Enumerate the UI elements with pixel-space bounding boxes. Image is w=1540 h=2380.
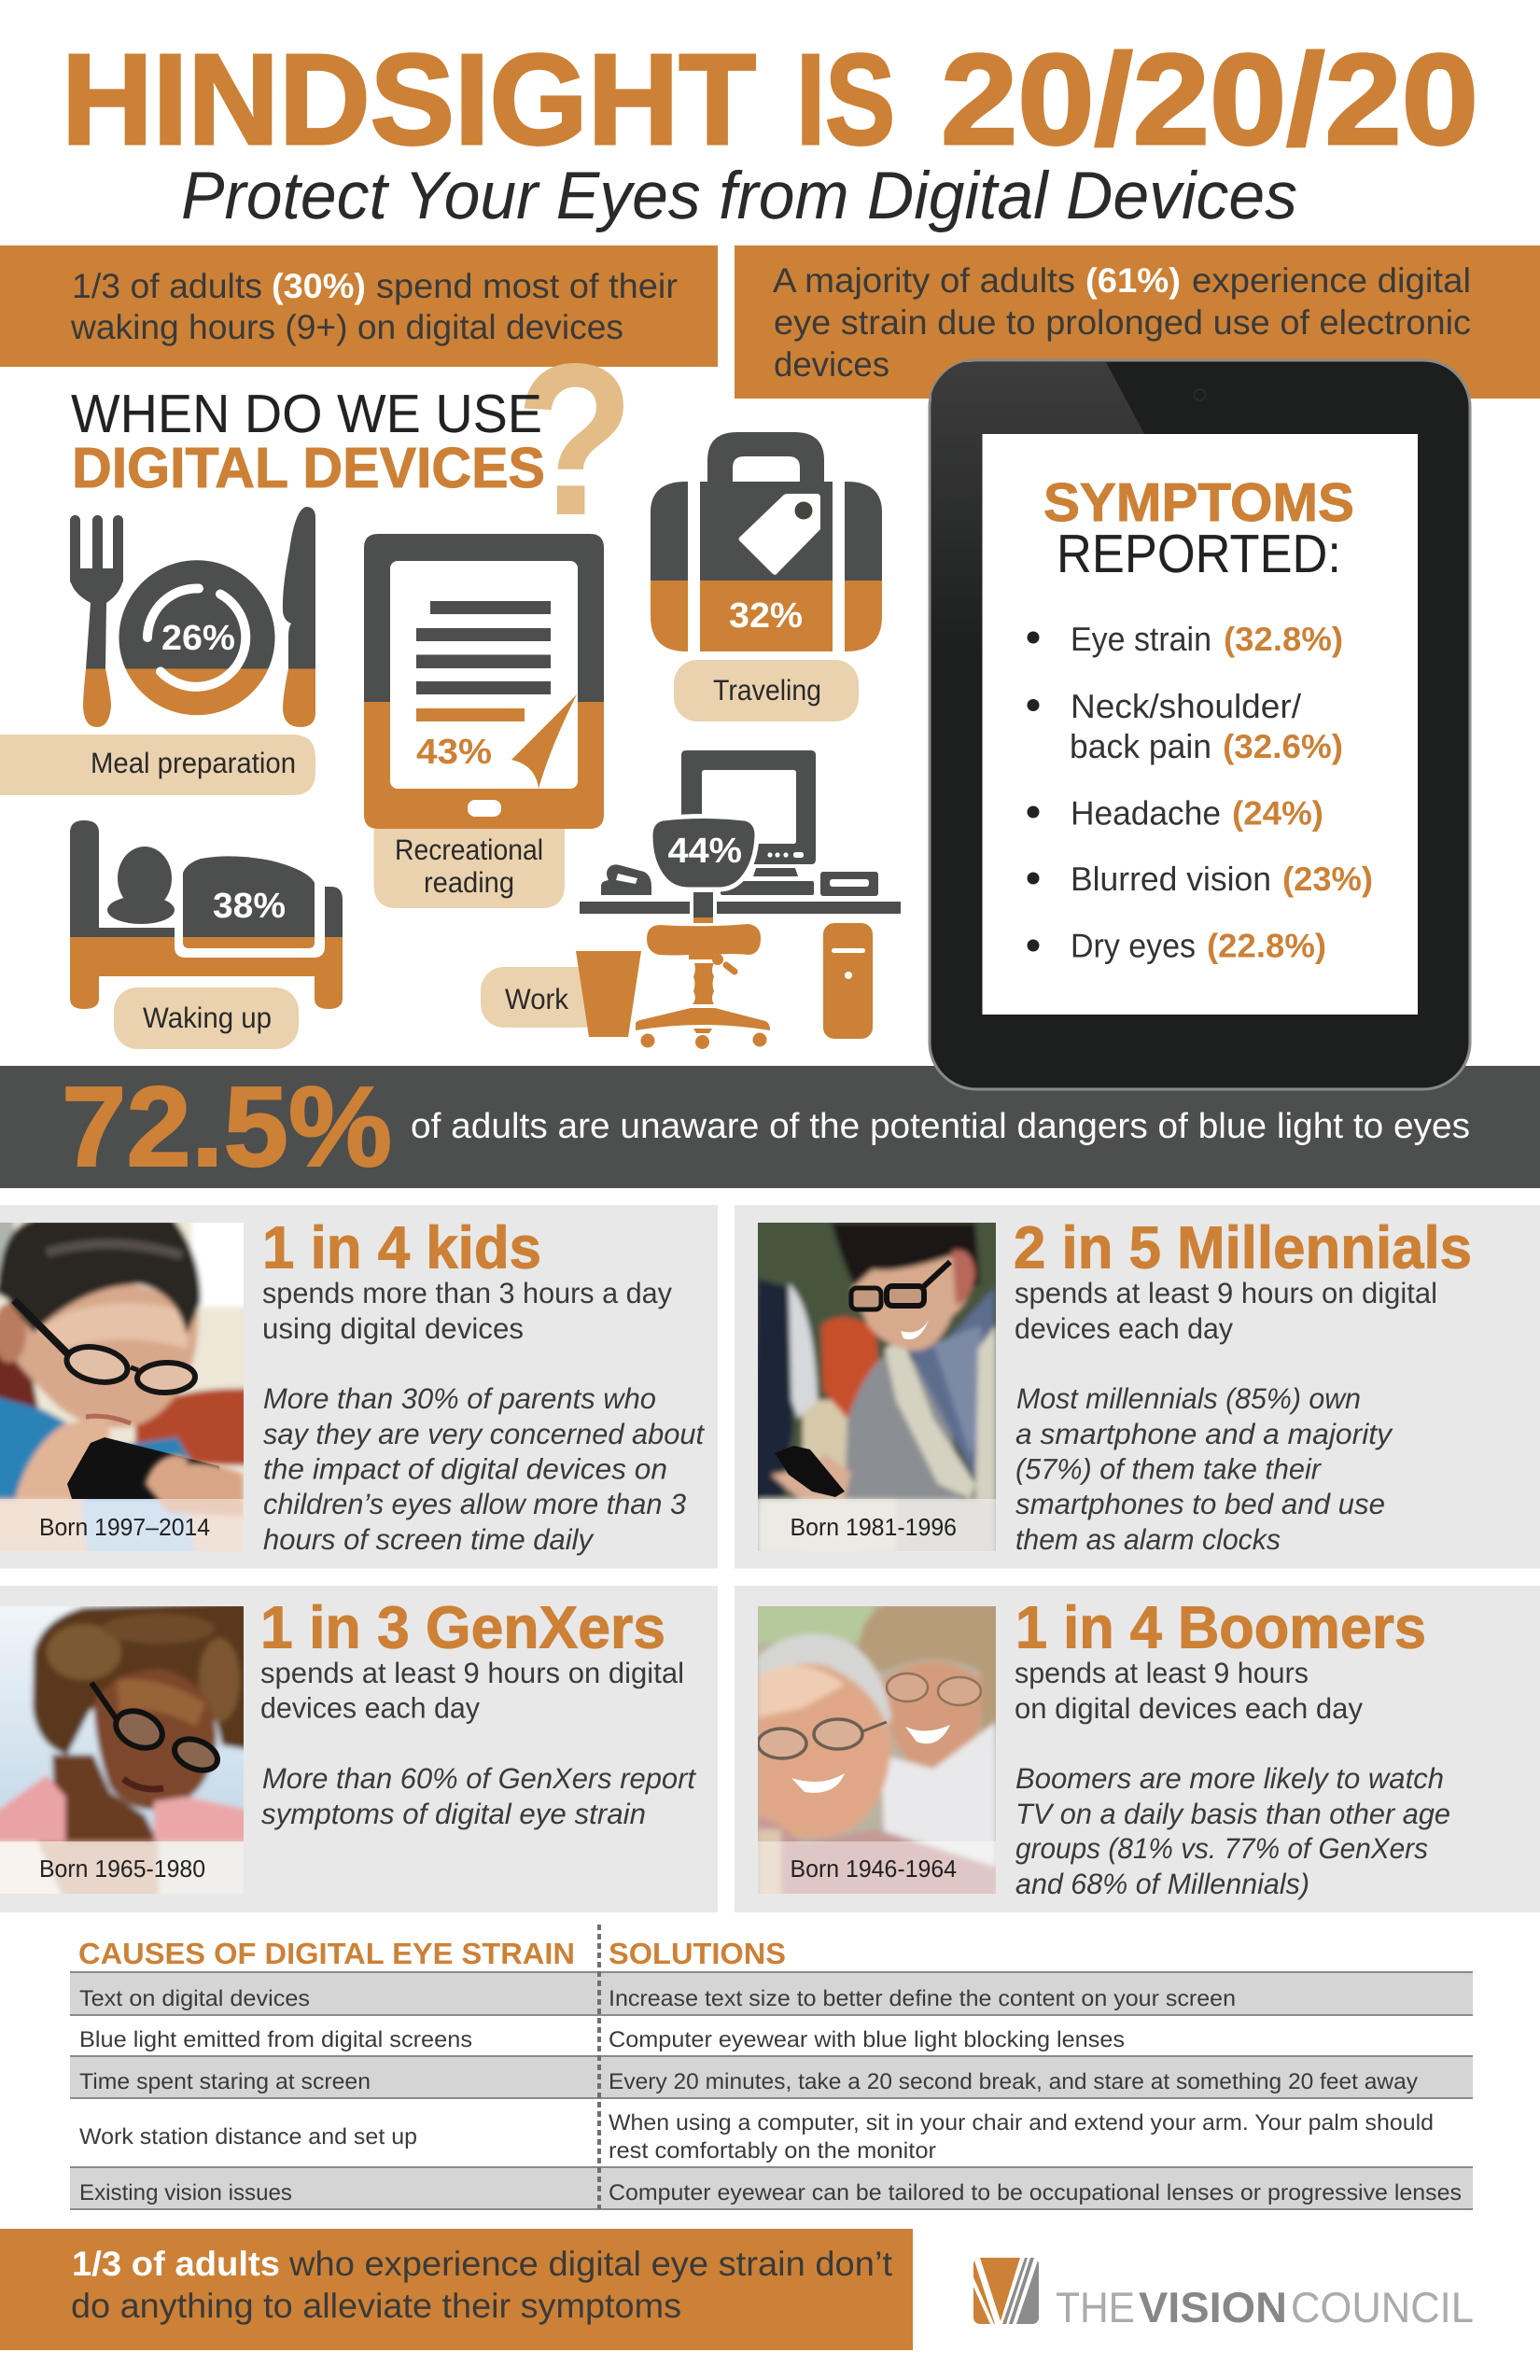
title: HINDSIGHT [62, 28, 756, 172]
icon: question mark: ? [515, 319, 635, 561]
stat heading: 1 in 4 kids [262, 1213, 541, 1281]
banner: 1/3 of adults do nothing: do anything to alleviate their symptoms [71, 2287, 681, 2325]
banner: 30% of adults [0, 245, 718, 367]
banner: 61% of adults [735, 245, 1540, 399]
row text: Work station distance and set up [79, 2124, 417, 2149]
detail text [1015, 1382, 1394, 1556]
banner: 30% of adults: (30%) [272, 267, 366, 305]
detail text: Boomers are more likely to watch [1015, 1762, 1444, 1795]
icon: suitcase 32% [651, 432, 882, 651]
detail text: TV on a daily basis than other age [1015, 1798, 1450, 1830]
label: meal preparation [0, 735, 315, 795]
detail text [261, 1762, 696, 1830]
symptoms list: (24%) [1232, 793, 1323, 833]
symptoms list [1027, 620, 1373, 965]
label: waking up: Waking up [143, 1001, 272, 1034]
detail text: them as alarm clocks [1015, 1523, 1281, 1556]
description: spends at least 9 hours [1015, 1657, 1309, 1689]
label: work [481, 967, 607, 1028]
stat heading: 2 in 5 Millennials [1014, 1213, 1472, 1281]
detail text [263, 1382, 705, 1556]
detail text: groups (81% vs. 77% of GenXers [1015, 1832, 1428, 1865]
symptoms heading: REPORTED: [1057, 524, 1341, 584]
photo: older couple [758, 1606, 996, 1894]
label: meal preparation: Meal preparation [91, 747, 296, 779]
label: traveling [674, 660, 859, 721]
heading: causes: CAUSES OF DIGITAL EYE STRAIN [78, 1937, 575, 1970]
symptoms list: (32.8%) [1224, 620, 1343, 658]
row text: Time spent staring at screen [79, 2069, 371, 2094]
label: waking up [114, 987, 299, 1049]
banner: 61% of adults: devices [774, 345, 889, 384]
detail text: Most millennials (85%) own [1016, 1382, 1361, 1415]
title: 20/20/20 [941, 28, 1478, 172]
symptoms list: (23%) [1282, 860, 1373, 898]
label: traveling: Traveling [713, 674, 821, 707]
description: spends more than 3 hours a day [262, 1277, 672, 1309]
icon: tablet reading 43%: 43% [416, 733, 492, 772]
description [1015, 1277, 1437, 1345]
subtitle: Protect Your Eyes from Digital Devices [181, 159, 1297, 233]
banner: 61% of adults: A majority of adults [773, 261, 1075, 300]
panel: symptoms tablet [930, 360, 1470, 1089]
icon: office desk 44%: 44% [668, 832, 742, 871]
heading: when do we use digital devices: WHEN DO WE USE [71, 384, 542, 444]
heading: when do we use digital devices: DIGITAL DEVICES [72, 436, 545, 499]
table: causes and solutions [70, 1925, 1473, 2210]
row text: Computer eyewear can be tailored to be occupational lenses or progressive lenses [609, 2180, 1462, 2205]
banner: 61% of adults: eye strain due to prolonged use of electronic [774, 303, 1471, 342]
description: devices each day [260, 1691, 480, 1725]
heading: when do we use digital devices [71, 384, 545, 499]
stat bar: 72.5%: of adults are unaware of the potential dangers of blue light to eyes [411, 1107, 1470, 1146]
banner: 30% of adults: spend most of their [376, 267, 678, 305]
description [260, 1657, 684, 1725]
label: recreational reading: reading [424, 866, 514, 899]
panel: genxers [0, 1586, 718, 1912]
description: on digital devices each day [1015, 1692, 1363, 1725]
photo: boy with smartphone [0, 1213, 257, 1559]
icon: meal preparation 26%: 26% [161, 619, 235, 658]
caption: Born 1965-1980 [39, 1855, 205, 1883]
label: recreational reading [373, 829, 565, 908]
banner: 1/3 of adults do nothing [0, 2229, 913, 2350]
banner: 30% of adults: waking hours (9+) on digital devices [70, 308, 623, 346]
banner: 1/3 of adults do nothing: who experience digital eye strain don’t [288, 2245, 893, 2283]
description [1015, 1657, 1363, 1725]
stat bar: 72.5% [0, 1063, 1540, 1190]
logo mark [973, 2258, 1039, 2324]
caption: Born 1946-1964 [790, 1855, 957, 1883]
logo wordmark: VISION [1139, 2283, 1287, 2331]
icon: suitcase 32%: 32% [729, 596, 803, 636]
stat heading: 1 in 4 Boomers [1015, 1594, 1426, 1661]
panel: kids [0, 1205, 718, 1568]
symptoms list: Blurred vision [1071, 860, 1271, 898]
row text: Computer eyewear with blue light blocking lenses [609, 2027, 1125, 2052]
icon: tablet reading 43% [364, 534, 604, 829]
detail text: More than 30% of parents who [263, 1382, 656, 1415]
label: recreational reading: Recreational [395, 833, 543, 866]
caption: Born 1997–2014 [39, 1513, 210, 1541]
icon: office desk 44% [576, 750, 901, 1049]
row text [79, 1986, 1462, 2205]
panel: millennials [735, 1205, 1540, 1568]
row text: Text on digital devices [79, 1986, 310, 2011]
icon: meal preparation 26% [70, 507, 315, 727]
symptoms list: Neck/shoulder/ [1071, 687, 1301, 725]
symptoms list: (32.6%) [1223, 727, 1343, 765]
banner: 30% of adults: 1/3 of adults [72, 267, 262, 305]
title [62, 28, 1478, 172]
detail text: hours of screen time daily [263, 1523, 595, 1556]
description: spends at least 9 hours on digital [1015, 1277, 1437, 1309]
row text: rest comfortably on the monitor [609, 2138, 936, 2163]
photo: man with phone [758, 1223, 996, 1551]
heading: solutions: SOLUTIONS [609, 1937, 786, 1970]
symptoms list: back pain [1070, 727, 1211, 765]
detail text: say they are very concerned about [263, 1418, 705, 1450]
icon: bed 38%: 38% [213, 887, 286, 926]
row text: Every 20 minutes, take a 20 second break, and stare at something 20 feet away [609, 2069, 1418, 2094]
detail text: a smartphone and a majority [1015, 1418, 1394, 1450]
banner: 61% of adults: experience digital [1192, 261, 1471, 300]
detail text: symptoms of digital eye strain [261, 1798, 646, 1830]
detail text: smartphones to bed and use [1015, 1488, 1385, 1520]
detail text: (57%) of them take their [1015, 1452, 1323, 1486]
label: work: Work [505, 983, 568, 1015]
detail text [1015, 1762, 1450, 1900]
symptoms list: Dry eyes [1071, 926, 1196, 965]
logo: the vision council [973, 2258, 1473, 2324]
description: spends at least 9 hours on digital [260, 1657, 684, 1689]
row text: Increase text size to better define the content on your screen [609, 1986, 1236, 2011]
row text: Existing vision issues [79, 2180, 292, 2205]
logo wordmark: COUNCIL [1291, 2283, 1474, 2331]
banner: 61% of adults: (61%) [1085, 261, 1181, 300]
detail text: More than 60% of GenXers report [262, 1762, 696, 1795]
symptoms heading: SYMPTOMS [1043, 472, 1354, 533]
icon: bed 38% [70, 820, 343, 1009]
detail text: children’s eyes allow more than 3 [263, 1488, 686, 1520]
panel: boomers [735, 1586, 1540, 1912]
row text: Blue light emitted from digital screens [79, 2027, 472, 2052]
detail text: the impact of digital devices on [263, 1452, 667, 1486]
caption: Born 1981-1996 [790, 1513, 957, 1541]
symptoms list: (22.8%) [1207, 926, 1326, 965]
logo wordmark: THE [1056, 2283, 1135, 2331]
symptoms heading [1043, 472, 1354, 584]
title: IS [796, 28, 895, 172]
symptoms list: Eye strain [1071, 620, 1211, 658]
row text: When using a computer, sit in your chair and extend your arm. Your palm should [609, 2110, 1434, 2135]
logo wordmark [1056, 2283, 1474, 2331]
banner: 1/3 of adults do nothing: 1/3 of adults [72, 2245, 280, 2283]
detail text: and 68% of Millennials) [1015, 1868, 1309, 1900]
description: using digital devices [262, 1312, 524, 1345]
description [262, 1277, 672, 1345]
description: devices each day [1015, 1312, 1233, 1345]
stat bar: 72.5%: 72.5% [62, 1063, 392, 1190]
stat heading: 1 in 3 GenXers [260, 1594, 665, 1661]
symptoms list: Headache [1071, 793, 1221, 833]
photo: woman with glasses [0, 1606, 244, 1894]
